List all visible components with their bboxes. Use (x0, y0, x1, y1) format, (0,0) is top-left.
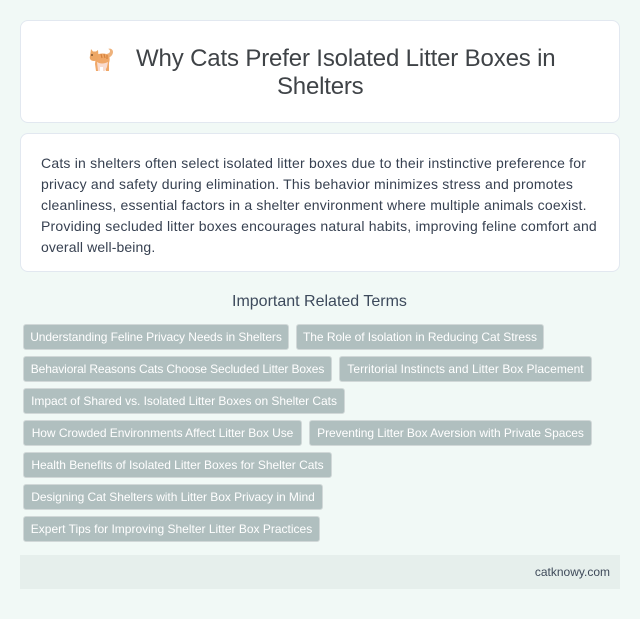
title: Shelters (277, 73, 363, 100)
tag: Designing Cat Shelters with Litter Box Privacy in Mind (31, 490, 315, 504)
tag: The Role of Isolation in Reducing Cat Stress (303, 330, 537, 344)
tag (296, 324, 544, 350)
tag: Health Benefits of Isolated Litter Boxes for Shelter Cats (31, 458, 324, 472)
tag (23, 452, 332, 478)
description text (41, 155, 597, 255)
tag (23, 356, 332, 382)
tag: How Crowded Environments Affect Litter Box Use (32, 426, 293, 440)
description text: overall well-being. (41, 239, 155, 255)
footer source: catknowy.com (535, 565, 610, 579)
tag (23, 484, 323, 510)
panel: description (20, 133, 620, 272)
tag: Impact of Shared vs. Isolated Litter Boxes on Shelter Cats (31, 394, 337, 408)
tag (23, 388, 345, 414)
tags list (23, 324, 592, 542)
description text: Providing secluded litter boxes encourages natural habits, improving feline comfort and (41, 218, 597, 234)
tag: Territorial Instincts and Litter Box Placement (347, 362, 584, 376)
heading: important related terms: Important Related Terms (232, 293, 407, 310)
description text: cleanliness, essential factors in a shelter environment where multiple animals coexist. (41, 197, 587, 213)
icon: cat (90, 48, 113, 71)
title (136, 45, 556, 100)
description text: Cats in shelters often select isolated litter boxes due to their instinctive preference for (41, 155, 586, 171)
tag (339, 356, 592, 382)
title: Why Cats Prefer Isolated Litter Boxes in (136, 45, 556, 72)
description text: privacy and safety during elimination. This behavior minimizes stress and promotes (41, 176, 573, 192)
tag (309, 420, 592, 446)
tag (23, 324, 289, 350)
tag: Understanding Feline Privacy Needs in Shelters (30, 330, 282, 344)
tag: Behavioral Reasons Cats Choose Secluded Litter Boxes (31, 362, 324, 376)
footer bar (20, 555, 620, 589)
tag (23, 420, 302, 446)
tag: Expert Tips for Improving Shelter Litter Box Practices (31, 522, 312, 536)
panel: title card (20, 20, 620, 123)
tag: Preventing Litter Box Aversion with Private Spaces (317, 426, 584, 440)
tag (23, 516, 320, 542)
